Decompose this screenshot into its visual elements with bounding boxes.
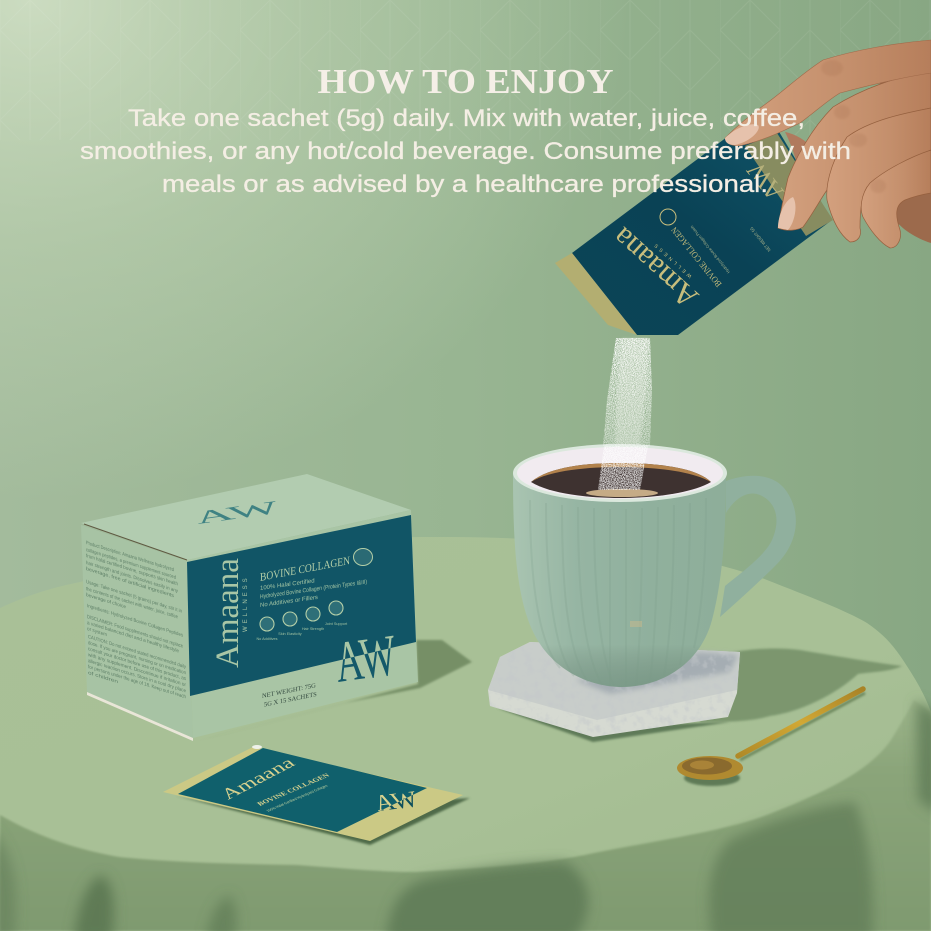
instructions text [80, 105, 851, 198]
hand [725, 40, 931, 248]
box left panel: beverage, free of artificial ingredients [86, 566, 174, 599]
title: HOW TO ENJOY [318, 62, 614, 101]
pouch details: Hydrolyzed Bovine Collagen Protein [689, 225, 731, 275]
mug ribs [530, 498, 706, 686]
box left panel: allergic reaction occurs. Store in a cool dry place [88, 658, 186, 694]
pouch wellness: WELLNESS [651, 240, 693, 279]
pouch title: BOVINE COLLAGEN [669, 225, 724, 289]
box left panel: CAUTION: Do not exceed stated recommended daily [88, 634, 186, 670]
box left panel: Ingredients: Hydrolyzed Bovine Collagen Peptides [87, 603, 183, 639]
instructions text: meals or as advised by a healthcare professional. [162, 171, 768, 198]
instructions text: smoothies, or any hot/cold beverage. Consume preferably with [80, 138, 851, 165]
box claims: 100% Halal Certified [260, 578, 315, 592]
box shadow on table [193, 640, 472, 742]
gold spoon [677, 689, 865, 786]
box large monogram [338, 636, 394, 682]
cloth drape [0, 700, 931, 931]
box large monogram: AW [332, 622, 400, 695]
middle finger [778, 73, 931, 230]
box icon captions: No Additives [256, 637, 278, 641]
box icon captions [256, 622, 348, 641]
box left panel: with any supplement. Discontinue if irritation or [88, 652, 186, 688]
box claims: No Additives or Fillers [260, 595, 318, 609]
ring finger [827, 108, 931, 242]
box left panel: hair strength and joints. Dissolves easily in any [86, 560, 178, 595]
box benefit icons [260, 601, 343, 631]
pouch monogram: AW [741, 156, 790, 206]
box claims [260, 571, 367, 609]
box left panel: a varied balanced diet and a healthy lifestyle [87, 620, 179, 655]
box left panel: Usage: Take one sachet (5 grams) per day, stir it in [86, 579, 182, 615]
box brand name: Amaana [210, 558, 246, 668]
net weight: NET WEIGHT: 75G [262, 682, 316, 700]
sachet top gold band [745, 133, 833, 236]
mug [513, 444, 796, 687]
box left panel: DISCLAIMER: Food supplements should not replace [87, 614, 183, 650]
box claims: Hydrolyzed Bovine Collagen (Protein Types I&III) [260, 580, 367, 600]
box top face [81, 474, 411, 560]
box left panel: consult your doctor before use of this product, as [88, 646, 186, 682]
box icon captions: Skin Elasticity [278, 632, 302, 636]
index finger [725, 40, 931, 146]
box icon captions: Hair Strength [302, 627, 324, 631]
box large monogram: AW [332, 622, 400, 695]
product box [81, 474, 418, 741]
sachet brand: Amaana [216, 754, 299, 803]
box front panel [187, 510, 418, 738]
sachet title: BOVINE COLLAGEN [255, 771, 332, 807]
box left panel: or system [87, 626, 107, 638]
pouch brand: Amaana [605, 220, 705, 316]
halal badge [354, 548, 372, 566]
box left panel: Product Description: Amaana Wellness hydrolyzed [86, 540, 174, 573]
coffee [531, 463, 711, 498]
sachet monogram: AW [370, 786, 422, 816]
box left panel: beverage of choice [86, 592, 126, 610]
box top face: AW [189, 498, 286, 528]
box left panel: of children [88, 670, 118, 685]
mug handle [720, 476, 796, 617]
pouch emblem [660, 209, 676, 225]
pouring sachet [555, 130, 833, 335]
net weight [262, 682, 317, 709]
thumb behind sachet [785, 132, 809, 168]
sachet details: 100% Halal Certified Hydrolyzed Collagen [265, 784, 330, 813]
marble coaster [488, 642, 740, 742]
box left panel: from halal certified bovine, supports skin health [86, 553, 178, 588]
powder stream [598, 338, 652, 490]
box left panel [81, 525, 193, 738]
mug rim [513, 444, 727, 502]
box left panel: collagen peptides, a premium supplement sourced [86, 547, 176, 581]
sachet gold edge [555, 253, 637, 335]
cloth fold shadows [0, 700, 931, 931]
fingernails [725, 124, 795, 230]
round table with green cloth [0, 537, 931, 931]
mug reflection [630, 621, 642, 627]
mug shadow on table [700, 648, 902, 722]
box left panel: dose. If you are pregnant, nursing or on medication [88, 640, 186, 676]
pouch net weight: NET WEIGHT: 5G [749, 226, 772, 253]
box left panel: for persons under the age of 18. Keep out of reach [88, 664, 186, 700]
net weight: 5G X 15 SACHETS [264, 691, 317, 709]
box product title: BOVINE COLLAGEN [260, 554, 351, 584]
box wellness label: WELLNESS [243, 575, 249, 632]
box left panel: the contents of the sachet with water, juice, coffee [86, 586, 178, 621]
instructions text: Take one sachet (5g) daily. Mix with water, juice, coffee, [128, 105, 805, 132]
palm [878, 80, 931, 243]
sachet lying on table [163, 745, 470, 845]
mug body [513, 473, 726, 687]
knuckle shading [821, 60, 886, 193]
box icon captions: Joint Support [325, 622, 348, 626]
little finger [861, 150, 931, 248]
sachet monogram: AW [370, 786, 422, 816]
sachet monogram [378, 791, 414, 811]
